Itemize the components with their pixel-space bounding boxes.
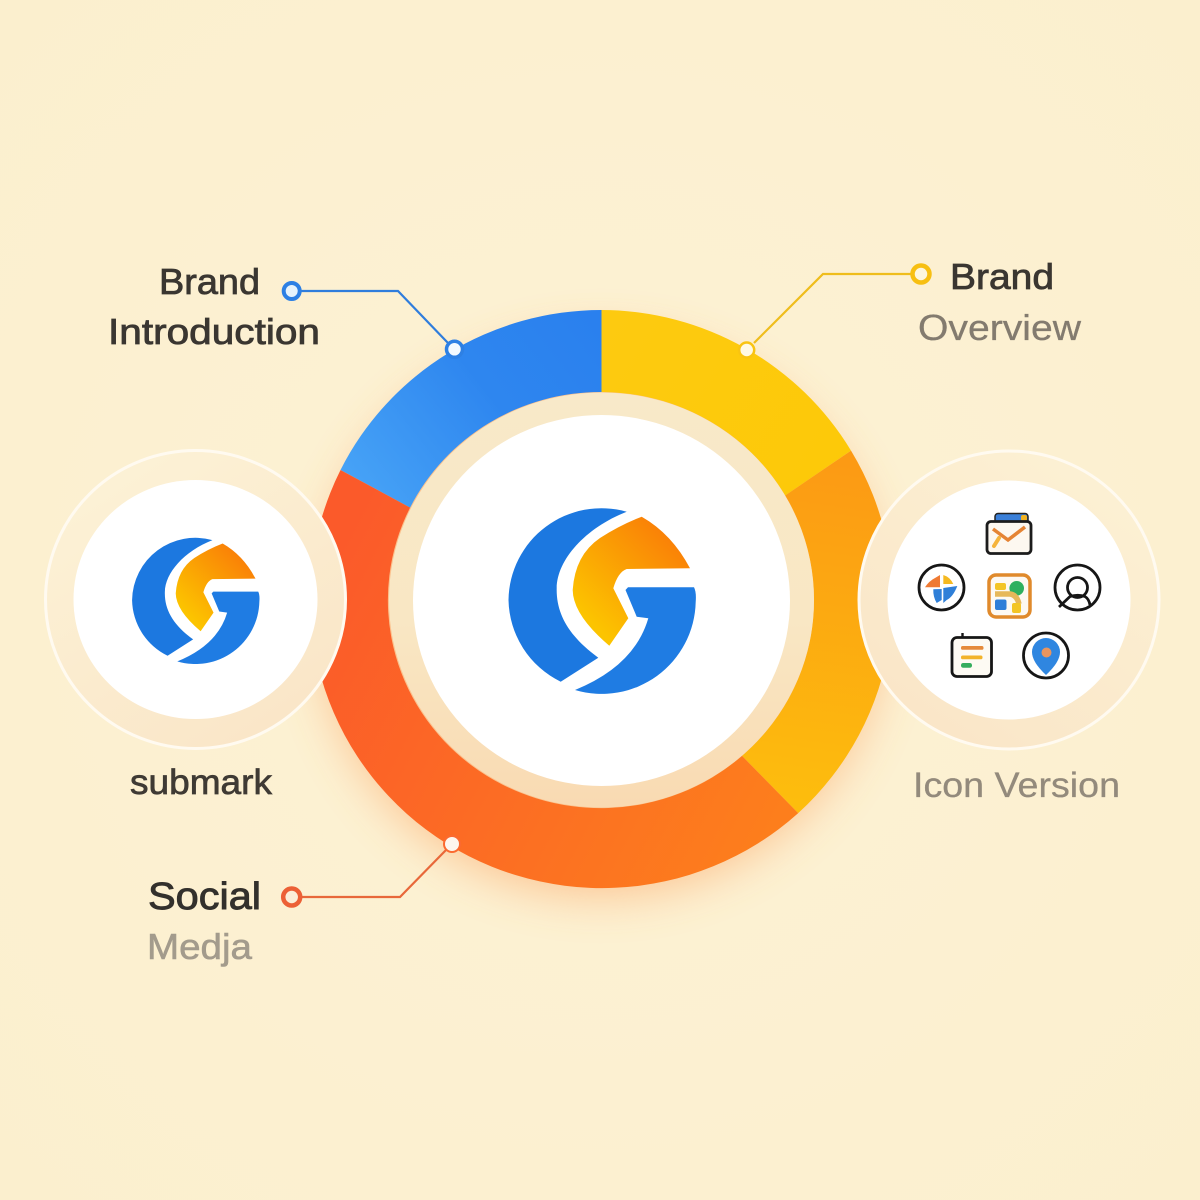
label: brand introduction: Brand (159, 261, 260, 302)
label: brand overview (918, 256, 1082, 348)
icon: map pin (1024, 633, 1068, 678)
submark white disc (74, 480, 318, 719)
icon panel white disc (888, 480, 1130, 720)
label: social media (147, 876, 261, 967)
segment: blue brand introduction (340, 310, 602, 508)
center logo (508, 508, 696, 694)
label: icon version: Icon Version (913, 766, 1120, 805)
segment: amber icon version (742, 451, 893, 813)
submark logo (132, 538, 260, 664)
segment: orange social media (310, 470, 798, 888)
panel: icon version (859, 451, 1159, 749)
label: brand overview: Brand (950, 256, 1054, 297)
submark halo (46, 450, 346, 748)
label: social media: Medja (147, 926, 253, 967)
connector: brand introduction (284, 283, 462, 357)
center white disc (413, 415, 790, 786)
label: brand introduction: Introduction (108, 311, 320, 352)
icon: mail (987, 514, 1031, 554)
icon: colourful badge (919, 565, 964, 610)
label: submark: submark (130, 763, 273, 802)
icon panel halo (859, 451, 1159, 749)
label: brand introduction (108, 261, 320, 352)
panel: submark (46, 450, 346, 748)
connector: social media (283, 836, 460, 906)
donut ring chart (310, 310, 893, 888)
label: brand overview: Overview (918, 307, 1082, 348)
connector: brand overview (739, 266, 930, 358)
segment: yellow brand overview (602, 310, 851, 496)
icon: central app tile (989, 575, 1030, 617)
icon: notes (952, 633, 992, 676)
label: social media: Social (148, 876, 261, 918)
ring glow shadow (319, 338, 883, 894)
icon: person (1055, 565, 1100, 610)
center halo (389, 392, 814, 808)
